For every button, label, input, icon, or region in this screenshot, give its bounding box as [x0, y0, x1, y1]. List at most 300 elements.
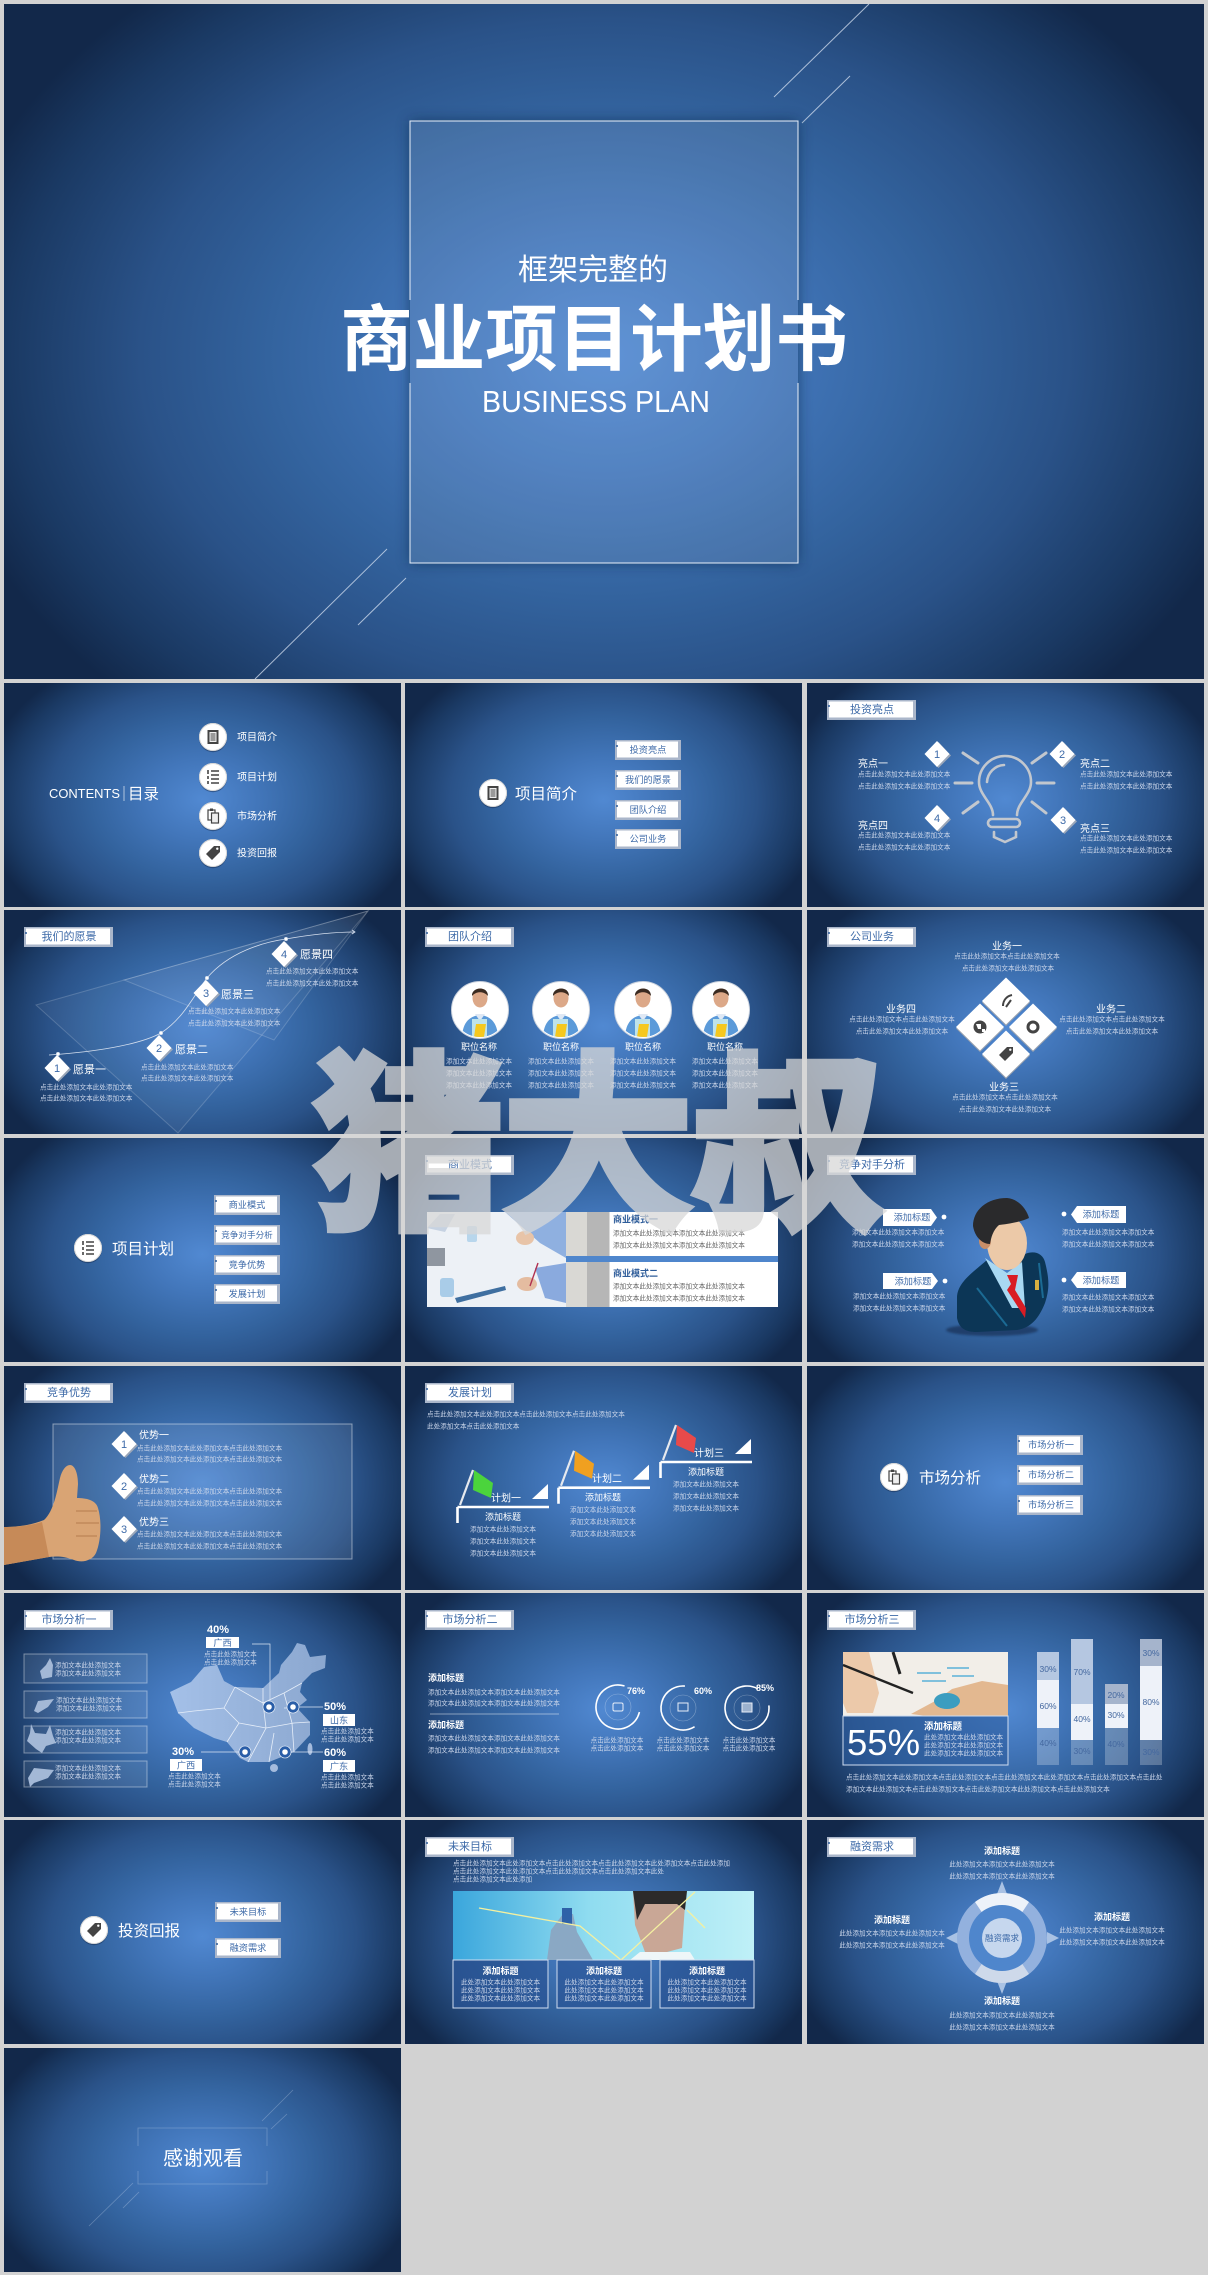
intro text: 点击此处添加文本此处添加	[453, 1874, 533, 1883]
ring 60%	[653, 1678, 713, 1752]
section tags	[215, 1902, 281, 1958]
point 1: 点击此处添加文本此处添加文本	[858, 781, 951, 790]
section tags: 市场分析一	[1028, 1439, 1074, 1450]
heading tag: 竞争对手分析	[839, 1157, 905, 1171]
section tags: 未来目标	[230, 1906, 266, 1917]
member 3: 添加文本此处添加文本	[610, 1068, 676, 1077]
business 4: 业务四	[886, 1003, 916, 1016]
map callout 40%: 40%	[207, 1624, 229, 1636]
stacked bar chart: 80%	[1142, 1697, 1160, 1707]
business 2: 点击此处添加文本点击此处添加文本	[1059, 1014, 1165, 1023]
map callout 40%: 点击此处添加文本	[204, 1657, 257, 1666]
panel: 公司业务	[807, 910, 1204, 1134]
contents item: 项目计划	[199, 763, 277, 792]
callout bottom right: 添加文本此处添加文本添加文本	[1062, 1292, 1155, 1301]
callout bottom right: 添加文本此处添加文本添加文本	[1062, 1304, 1155, 1313]
advantage 3: 3	[121, 1524, 127, 1536]
55% stat box: 添加标题	[924, 1720, 963, 1732]
member 1: 添加文本此处添加文本	[446, 1068, 512, 1077]
bottom text: 添加标题	[984, 1995, 1020, 2006]
contents item: 投资回报	[199, 839, 277, 868]
vision 3: 愿景三	[221, 988, 254, 1001]
stacked bar chart: 30%	[1142, 1648, 1160, 1658]
callout top right: 添加文本此处添加文本添加文本	[1062, 1227, 1155, 1236]
text block 2: 添加标题	[428, 1719, 464, 1730]
number diamonds	[924, 741, 1077, 834]
advantage 2: 2	[121, 1481, 127, 1493]
goal box 3: 此处添加文本此处添加文本	[667, 1993, 747, 2002]
point 3: 点击此处添加文本此处添加文本	[1080, 845, 1173, 854]
panel: section 市场分析	[807, 1366, 1204, 1590]
cover subtitle: 框架完整的	[518, 254, 668, 287]
point 4: 点击此处添加文本此处添加文本	[858, 830, 951, 839]
left text	[839, 1914, 945, 1949]
goal box 1: 此处添加文本此处添加文本	[461, 1985, 540, 1994]
cover english title: BUSINESS PLAN	[482, 384, 710, 419]
member 3	[610, 982, 676, 1089]
intro text: 点击此处添加文本此处添加文本点击此处添加文本点击此处添加文本此处添加文本点击此处添加	[453, 1858, 730, 1867]
stacked bar chart: 30%	[1039, 1664, 1057, 1674]
contents heading: 目录	[128, 785, 159, 803]
point 2	[1080, 757, 1173, 790]
vision 2: 点击此处添加文本此处添加文本	[141, 1062, 234, 1071]
model 2 box	[610, 1262, 778, 1307]
business 1: 点击此处添加文本此处添加文本	[962, 963, 1055, 972]
number diamonds: 3	[1060, 815, 1066, 827]
vision 2	[141, 1035, 234, 1082]
vision 1: 点击此处添加文本此处添加文本	[40, 1093, 133, 1102]
panel: section 项目简介	[405, 683, 802, 907]
ring 60%: 60%	[694, 1686, 712, 1696]
vision 1: 点击此处添加文本此处添加文本	[40, 1082, 133, 1091]
model 1 box: 添加文本此处添加文本添加文本此处添加文本	[613, 1228, 745, 1237]
plan 3: 添加标题	[688, 1466, 724, 1477]
point 1	[858, 757, 951, 790]
heading tag: 未来目标	[448, 1839, 492, 1853]
callout bottom left: 添加标题	[895, 1276, 931, 1286]
cover title: 商业项目计划书	[340, 300, 848, 381]
heading tag: 商业模式	[448, 1157, 492, 1171]
icon: thumbs up hand	[4, 1465, 100, 1565]
section heading: 项目简介	[515, 785, 578, 803]
plan 2	[558, 1451, 650, 1538]
heading tag	[425, 1155, 514, 1175]
heading tag: 市场分析三	[844, 1612, 900, 1626]
business 3	[952, 1081, 1058, 1113]
ring 85%	[723, 1683, 776, 1752]
advantage 1	[112, 1429, 282, 1463]
member 3: 职位名称	[625, 1041, 661, 1052]
vision 4: 愿景四	[300, 948, 333, 961]
province box 4: 添加文本此处添加文本	[55, 1771, 121, 1780]
advantage 3	[112, 1516, 282, 1550]
section icon	[479, 779, 507, 808]
office photo	[427, 1212, 610, 1307]
panel: 团队介绍	[405, 910, 802, 1134]
heading tag	[827, 927, 916, 947]
plan 2: 计划二	[592, 1472, 622, 1485]
plan 1	[458, 1470, 549, 1557]
business 3: 业务三	[989, 1081, 1019, 1094]
stacked bar chart: 30%	[1107, 1710, 1125, 1720]
vision 4: 点击此处添加文本此处添加文本	[266, 966, 359, 975]
panel: 商业模式	[405, 1138, 802, 1362]
heading tag: 融资需求	[850, 1840, 894, 1853]
heading tag	[24, 927, 113, 947]
map callout 50%: 点击此处添加文本	[321, 1726, 374, 1735]
goal box 2: 此处添加文本此处添加文本	[564, 1993, 644, 2002]
plan 2: 添加标题	[585, 1492, 621, 1503]
vision 2: 愿景二	[175, 1043, 208, 1056]
decorative frame and lines	[89, 2090, 293, 2226]
heading tag	[425, 927, 514, 947]
vision 3	[188, 980, 281, 1027]
vision 2: 2	[156, 1043, 162, 1055]
business 4: 点击此处添加文本此处添加文本	[856, 1026, 949, 1035]
model 1 box	[610, 1212, 778, 1256]
vision 4: 4	[281, 949, 287, 961]
member 1: 职位名称	[461, 1041, 497, 1052]
section tags: 团队介绍	[630, 804, 666, 815]
financing wheel diagram	[946, 1881, 1059, 1994]
plan 3	[660, 1425, 752, 1512]
province box 1: 添加文本此处添加文本	[55, 1660, 121, 1669]
panel: 我们的愿景	[4, 910, 401, 1134]
advantage 2	[112, 1473, 282, 1507]
province box 1: 添加文本此处添加文本	[55, 1668, 121, 1677]
future photo	[453, 1891, 754, 1960]
plan 1: 添加文本此处添加文本	[470, 1536, 536, 1545]
section tags: 投资亮点	[630, 744, 666, 755]
advantage 1: 点击此处添加文本此处添加文本点击此处添加文本	[137, 1454, 282, 1463]
section tags: 竞争优势	[229, 1259, 265, 1270]
map callout 30%: 点击此处添加文本	[168, 1771, 221, 1780]
map callout 50%: 50%	[324, 1701, 346, 1713]
heading tag	[425, 1610, 514, 1630]
business 2: 业务二	[1096, 1003, 1126, 1016]
heading tag	[24, 1383, 113, 1403]
map markers	[239, 1701, 299, 1758]
heading tag	[827, 1610, 916, 1630]
financing wheel diagram: 融资需求	[985, 1933, 1019, 1943]
ring 76%: 点击此处添加文本	[591, 1735, 644, 1744]
callout bottom left: 添加文本此处添加文本添加文本	[853, 1291, 946, 1300]
icon: businessman	[946, 1198, 1048, 1336]
vision 3: 3	[203, 988, 209, 1000]
callout top right	[1062, 1206, 1155, 1248]
heading tag: 投资亮点	[850, 702, 894, 716]
section heading: 项目计划	[112, 1240, 174, 1258]
callout top right: 添加文本此处添加文本添加文本	[1062, 1239, 1155, 1248]
stacked bar chart: 30%	[1142, 1747, 1160, 1757]
advantage 3: 优势三	[139, 1516, 169, 1529]
China map	[170, 1643, 326, 1772]
contents item: 投资回报: 投资回报	[237, 847, 277, 860]
panel: 竞争优势	[4, 1366, 401, 1590]
text block 1	[428, 1672, 560, 1707]
point 2: 点击此处添加文本此处添加文本	[1080, 769, 1173, 778]
heading tag	[827, 1155, 916, 1175]
callout bottom left	[853, 1273, 947, 1312]
heading tag	[827, 1837, 916, 1857]
province box 2: 添加文本此处添加文本	[56, 1703, 122, 1712]
member 1: 添加文本此处添加文本	[446, 1056, 512, 1065]
point 3	[1080, 822, 1173, 854]
goal box 1: 此处添加文本此处添加文本	[461, 1993, 540, 2002]
text block 2	[428, 1719, 560, 1754]
section tags: 发展计划	[229, 1288, 265, 1299]
contents heading: CONTENTS	[49, 786, 120, 801]
point 1: 亮点一	[858, 757, 888, 770]
map callout 40%	[204, 1624, 270, 1702]
bottom text: 此处添加文本添加文本此处添加文本	[949, 2022, 1055, 2031]
section tags: 市场分析三	[1028, 1499, 1074, 1510]
member 2	[528, 982, 594, 1089]
plan 3: 添加文本此处添加文本	[673, 1479, 739, 1488]
member 1: 添加文本此处添加文本	[446, 1080, 512, 1089]
model 1 box: 添加文本此处添加文本添加文本此处添加文本	[613, 1240, 745, 1249]
callout top left	[852, 1209, 946, 1248]
left text: 添加标题	[874, 1914, 910, 1925]
goal box 3: 此处添加文本此处添加文本	[667, 1985, 747, 1994]
member 4: 添加文本此处添加文本	[692, 1068, 758, 1077]
point 3: 点击此处添加文本此处添加文本	[1080, 833, 1173, 842]
member 4	[692, 982, 758, 1089]
ring 76%: 点击此处添加文本	[591, 1743, 644, 1752]
contents item: 市场分析: 市场分析	[237, 810, 277, 823]
province box 1	[24, 1654, 147, 1683]
callout top right: 添加标题	[1083, 1208, 1119, 1220]
plan 2: 添加文本此处添加文本	[570, 1505, 636, 1514]
translucent frame	[53, 1424, 352, 1559]
ring 85%: 点击此处添加文本	[723, 1743, 776, 1752]
panel: contents slide	[4, 683, 401, 907]
business 1: 业务一	[992, 940, 1022, 953]
footer text: 添加文本此处添加文本点击此处添加文本点击此处添加文本此处添加文本点击此处添加文本	[846, 1784, 1110, 1793]
bottom text	[949, 1995, 1055, 2031]
panel: 市场分析一	[4, 1593, 401, 1817]
business 1: 点击此处添加文本点击此处添加文本	[954, 951, 1060, 960]
vision 3: 点击此处添加文本此处添加文本	[188, 1018, 281, 1027]
decorative slash lines	[255, 4, 869, 679]
point 4: 亮点四	[858, 819, 888, 832]
panel: 市场分析三	[807, 1593, 1204, 1817]
map callout 60%: 60%	[324, 1747, 346, 1759]
vision 2: 点击此处添加文本此处添加文本	[141, 1073, 234, 1082]
member 3: 添加文本此处添加文本	[610, 1056, 676, 1065]
panel: 融资需求	[807, 1820, 1204, 2044]
member 2: 添加文本此处添加文本	[528, 1080, 594, 1089]
top text: 添加标题	[984, 1845, 1020, 1856]
plan 3: 添加文本此处添加文本	[673, 1491, 739, 1500]
analysis photo	[843, 1652, 1008, 1716]
ring 76%	[591, 1680, 645, 1752]
map callout 30%: 点击此处添加文本	[168, 1779, 221, 1788]
heading tag: 市场分析二	[442, 1612, 498, 1626]
model 2 box: 添加文本此处添加文本添加文本此处添加文本	[613, 1293, 745, 1302]
watermark: 猪大叔	[313, 1042, 883, 1254]
section icon	[74, 1234, 102, 1263]
heading tag: 公司业务	[850, 930, 894, 943]
point 4	[858, 819, 951, 851]
growth curve arrow	[49, 930, 355, 1056]
text block 2: 添加文本此处添加文本添加文本此处添加文本	[428, 1745, 560, 1754]
number diamonds: 1	[934, 749, 940, 761]
advantage 1: 1	[121, 1439, 127, 1451]
section tags: 市场分析二	[1028, 1469, 1074, 1480]
contents item: 项目简介	[199, 723, 277, 752]
heading tag	[827, 700, 916, 720]
province box 3: 添加文本此处添加文本	[55, 1735, 121, 1744]
map callout 40%: 广西	[213, 1637, 232, 1648]
section tags: 竞争对手分析	[221, 1229, 273, 1240]
footer text: 点击此处添加文本此处添加文本点击此处添加文本点击此处添加文本此处添加文本点击此处添加文本点击此处	[846, 1772, 1163, 1781]
member 1	[446, 982, 512, 1089]
panel: cover slide	[4, 4, 1204, 679]
plan 1: 计划一	[491, 1492, 521, 1504]
point 1: 点击此处添加文本此处添加文本	[858, 769, 951, 778]
business 2	[1059, 1003, 1165, 1035]
intro text: 点击此处添加文本此处添加文本点击此处添加文本点击此处添加文本	[427, 1409, 625, 1418]
text block 1: 添加文本此处添加文本添加文本此处添加文本	[428, 1698, 560, 1707]
advantage 3: 点击此处添加文本此处添加文本点击此处添加文本	[137, 1541, 282, 1550]
goal box 1	[453, 1960, 548, 2008]
business 4	[849, 1003, 955, 1035]
goal box 3: 添加标题	[689, 1965, 725, 1976]
callout bottom left: 添加文本此处添加文本添加文本	[853, 1303, 946, 1312]
map callout 60%	[285, 1747, 374, 1789]
member 2: 添加文本此处添加文本	[528, 1056, 594, 1065]
contents heading	[49, 785, 159, 803]
business 3: 点击此处添加文本点击此处添加文本	[952, 1092, 1058, 1101]
member 2: 添加文本此处添加文本	[528, 1068, 594, 1077]
section tags: 我们的愿景	[625, 774, 671, 785]
panel: section 投资回报	[4, 1820, 401, 2044]
heading tag: 发展计划	[448, 1385, 492, 1399]
heading tag	[24, 1610, 113, 1630]
55% stat box: 55%	[847, 1722, 920, 1763]
panel: section 项目计划	[4, 1138, 401, 1362]
advantage 2: 点击此处添加文本此处添加文本点击此处添加文本	[137, 1486, 282, 1495]
advantage 2: 点击此处添加文本此处添加文本点击此处添加文本	[137, 1498, 282, 1507]
goal box 3	[660, 1960, 754, 2008]
stacked bar chart: 40%	[1073, 1714, 1091, 1724]
map callout 50%: 点击此处添加文本	[321, 1734, 374, 1743]
plan 1: 添加标题	[485, 1511, 521, 1522]
advantage 3: 点击此处添加文本此处添加文本点击此处添加文本	[137, 1529, 282, 1538]
business 1	[954, 940, 1060, 972]
55% stat box: 此处添加文本此处添加文本	[924, 1740, 1004, 1749]
contents item: 项目简介: 项目简介	[237, 731, 277, 744]
55% stat box: 此处添加文本此处添加文本	[924, 1748, 1004, 1757]
stacked bar chart: 60%	[1039, 1701, 1057, 1711]
province box 4	[24, 1761, 147, 1787]
callout top left: 添加标题	[894, 1212, 930, 1222]
model 2 box: 添加文本此处添加文本添加文本此处添加文本	[613, 1281, 745, 1290]
point 2: 点击此处添加文本此处添加文本	[1080, 781, 1173, 790]
vision 4	[266, 941, 359, 987]
section tags: 商业模式	[229, 1199, 265, 1210]
55% stat box	[843, 1716, 1008, 1765]
map callout 30%: 30%	[172, 1746, 194, 1758]
section tags: 公司业务	[630, 833, 666, 844]
panel: 未来目标	[405, 1820, 802, 2044]
intro text: 点击此处添加文本此处添加文本点击此处添加文本点击此处添加文本此处	[453, 1866, 664, 1875]
map callout 60%: 点击此处添加文本	[321, 1772, 374, 1781]
top text: 此处添加文本添加文本此处添加文本	[949, 1871, 1055, 1880]
bottom text: 此处添加文本添加文本此处添加文本	[949, 2010, 1055, 2019]
left text: 此处添加文本添加文本此处添加文本	[839, 1928, 945, 1937]
province box 2	[24, 1691, 147, 1718]
top text: 此处添加文本添加文本此处添加文本	[949, 1859, 1055, 1868]
map callout 30%	[168, 1746, 245, 1788]
plan 3: 添加文本此处添加文本	[673, 1503, 739, 1512]
advantage 2: 优势二	[139, 1473, 169, 1486]
callout top left: 添加文本此处添加文本添加文本	[852, 1227, 945, 1236]
heading tag: 竞争优势	[47, 1385, 91, 1399]
goal box 1: 添加标题	[482, 1965, 519, 1976]
heading tag: 市场分析一	[42, 1612, 96, 1626]
business 2: 点击此处添加文本此处添加文本	[1066, 1026, 1159, 1035]
section tags	[615, 740, 681, 849]
contents item: 市场分析	[199, 802, 277, 831]
member 3: 添加文本此处添加文本	[610, 1080, 676, 1089]
goal box 1: 此处添加文本此处添加文本	[461, 1977, 540, 1986]
map callout 50%: 山东	[330, 1714, 348, 1725]
goal box 2: 此处添加文本此处添加文本	[564, 1977, 644, 1986]
section tags: 融资需求	[230, 1942, 266, 1953]
callout top left: 添加文本此处添加文本添加文本	[852, 1239, 945, 1248]
heading tag	[425, 1837, 514, 1857]
section icon	[880, 1463, 908, 1492]
vision 1: 1	[54, 1063, 60, 1075]
ring 60%: 点击此处添加文本	[657, 1735, 710, 1744]
business 3: 点击此处添加文本此处添加文本	[959, 1104, 1052, 1113]
plan 3: 计划三	[694, 1446, 724, 1460]
province box 2: 添加文本此处添加文本	[56, 1695, 122, 1704]
member 4: 职位名称	[707, 1041, 743, 1052]
text block 1: 添加标题	[428, 1672, 464, 1683]
text block 2: 添加文本此处添加文本添加文本此处添加文本	[428, 1733, 560, 1742]
map callout 60%: 广东	[330, 1760, 348, 1771]
section tags	[214, 1195, 280, 1304]
stacked bar chart: 30%	[1073, 1746, 1091, 1756]
55% stat box: 此处添加文本此处添加文本	[924, 1732, 1004, 1741]
number diamonds: 4	[934, 813, 940, 825]
business 4: 点击此处添加文本点击此处添加文本	[849, 1014, 955, 1023]
vision 1	[40, 1055, 133, 1102]
member 2: 职位名称	[543, 1041, 579, 1052]
map callout 60%: 点击此处添加文本	[321, 1780, 374, 1789]
stacked bar chart: 70%	[1073, 1667, 1091, 1677]
heading tag: 团队介绍	[448, 929, 492, 943]
advantage 1: 优势一	[139, 1429, 169, 1442]
thank you text: 感谢观看	[163, 2147, 243, 2170]
ring 85%: 85%	[756, 1683, 774, 1693]
point 4: 点击此处添加文本此处添加文本	[858, 842, 951, 851]
stacked bar chart	[1037, 1639, 1162, 1765]
stacked bar chart: 40%	[1039, 1738, 1057, 1748]
ring 85%: 点击此处添加文本	[723, 1735, 776, 1744]
intro text: 此处添加文本点击此处添加文本	[427, 1421, 520, 1430]
goal box 2: 此处添加文本此处添加文本	[564, 1985, 644, 1994]
section heading: 投资回报	[118, 1922, 180, 1940]
vision 3: 点击此处添加文本此处添加文本	[188, 1006, 281, 1015]
point 2: 亮点二	[1080, 757, 1110, 770]
faint background triangle	[36, 911, 368, 1133]
model 1 box: 商业模式一	[613, 1214, 658, 1224]
stacked bar chart: 20%	[1107, 1690, 1125, 1700]
